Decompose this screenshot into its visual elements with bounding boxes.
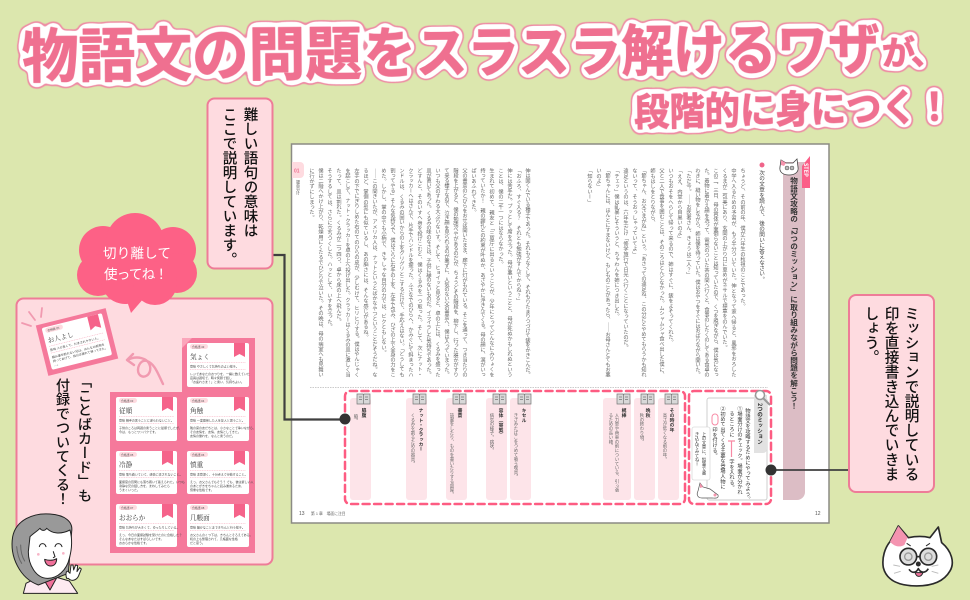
glossary entry: 晩秋: 秋の終わり頃。 <box>639 412 645 444</box>
card 43: レジであなたのおつりを、一緒に数えていた <box>190 371 250 376</box>
callout: mission marks: しょう。 <box>862 306 882 364</box>
speech balloon with pencil hint: 上の文章に、鉛筆で書 <box>701 431 707 476</box>
glossary entry: 書斎 <box>446 394 467 500</box>
body text: right page <box>586 167 746 377</box>
card 08: 机の上も整理されて、几帳面な性格 <box>190 536 238 541</box>
body text: left page: どすんと、そのいすへ身を投げこむと、僕はくるみを一つ取った。そして、次にナット・ <box>416 168 424 377</box>
card 07: おおらか <box>119 514 146 522</box>
title <box>22 2 944 94</box>
body text: left page: 左手の下でにぎりしめた右のてのひらの皮が、少しむけて、ヒリヒリする。僕はやんじゃく <box>353 167 360 377</box>
mission box: るところに <box>728 411 736 437</box>
speech balloon with pencil hint <box>692 427 710 480</box>
title: 、 <box>911 26 944 74</box>
illustration: cat with swirl glasses <box>883 526 952 586</box>
body text: left page: 伸には苦手だ。プッとして席を立った。母が悪いということと、母が死ぬかもしれぬという <box>506 167 514 377</box>
card 03: 今は、もっとワンパクです。 <box>119 429 158 434</box>
glossary entry: その時の年: 高さが低くなる前の年。 <box>662 412 668 461</box>
radiating accent lines <box>22 308 42 326</box>
glossary entry: 梶棒: 人力車や荷車の前についている、引っ張 <box>614 413 620 494</box>
card 05: 面接官の質問にも落ち着いて答えられた。いつも <box>119 479 185 484</box>
body text: right page: 父と二人で食事を囲むことは、そのころはとんどなかった。ムシャムシャ食べ出した僕に、 <box>658 168 666 377</box>
card 04: 角触 <box>190 406 204 415</box>
card 43: 合格語 43 <box>192 345 205 349</box>
card 04: その友情を、友情、友情としてきた。 <box>190 429 241 434</box>
page number right: 12 <box>815 511 821 517</box>
card 06: 慎重な性格です。 <box>190 487 214 492</box>
body text: right page: 「節ちゃんには、ほんとにすまないけど、もしものことがあったら、――お母さんとてもお悪 <box>604 168 612 377</box>
glossary entry: 脇腹: 脇。 <box>353 414 359 423</box>
card 07: おおらかな性格です。 <box>119 540 149 545</box>
panel: word cards <box>16 298 272 564</box>
card 08: お父さんのくつ下は、きちんとそろえてある。 <box>190 532 253 537</box>
body text: left page: クラッカーへはさんで、片手でハンドルを握った。ふさなでのひらへ、かみぐにて斜まったハ <box>407 168 414 377</box>
glossary entry: ナット・クラッカー: くるみを割るための器具。 <box>410 413 416 466</box>
card 06: 合格語 06 <box>192 453 205 457</box>
icon: small cat head <box>780 159 798 175</box>
body text: left page: るほど、掌側の型にも似ているし、あの脳さには、そんな感じがあるね。 <box>362 168 370 340</box>
page number left: 13 <box>299 511 305 517</box>
page background <box>292 144 829 523</box>
card 03: 子供のころは両親の言うことに従順でしたが、 <box>119 425 182 430</box>
card 08: 意味 細かなことまできちんと行う様子。 <box>190 524 245 530</box>
body text: left page: 皿が置いてあった。くるみの味のなさは、子供に縁のないものだ。イライラした気持ちであった。 <box>425 168 432 377</box>
body text: left page: て来る様子なので、泣き顔を見られるのが業ずに、人気のない父の書斎へ、僕は入っていまった。 <box>443 168 450 377</box>
glossary entry: その時の年: その時の年 <box>668 408 676 433</box>
card 04: 意味 一度関係した人を友人と思うこと。 <box>190 418 245 422</box>
card 05: 合格語 05 <box>121 453 134 457</box>
glossary entries <box>350 394 679 500</box>
speech cloud: 使ってね！ <box>104 266 168 282</box>
glossary entry: その時の年 <box>658 394 679 500</box>
body text: right page: た。着物に着かえ顔を洗って、電気のついた茶の間へ行くと、食事のしたくのしてある食卓の <box>703 168 710 377</box>
title: をスラスラ解けるワザ <box>364 5 880 89</box>
glossary entry: 晩秋 <box>634 394 655 500</box>
tilted card: 頼み事を断れない兄は、みんなの荷物を <box>51 342 105 359</box>
card 07 <box>116 504 182 547</box>
glossary entry: ナット・クラッカー: ナット・クラッカー <box>418 408 424 451</box>
speech cloud <box>77 213 197 313</box>
callout: mission marks: 印を直接書き込んでいきま <box>882 306 902 481</box>
glossary entry: キセル <box>510 394 531 500</box>
card 07: 合格語 07 <box>121 506 134 510</box>
body text: left page: そうするしては、さらに立ちつくした。ハッとして、いすを立った。 <box>326 168 334 329</box>
card 05: うまくいった。 <box>119 487 140 492</box>
tilted card: お人よし <box>47 330 74 345</box>
glossary entry: 晩秋: 晩秋 <box>644 407 652 419</box>
glossary entry: 書斎: 読書をしたり、ものを書いたりする部屋。 <box>449 412 455 497</box>
card 05 <box>116 451 185 494</box>
card 03: 意味 相手の言うことに逆らわないこと。 <box>119 418 174 422</box>
body text: right page: この二、三日、母の容体が面倒らないことは知っていたので、くつを脱ぎながら、僕は気になっ <box>712 168 720 377</box>
chapter tab: 場面分け <box>295 179 300 196</box>
body text: left page: 「おふろ、すぐ入る？ それとも勉強がすんでからね？」 <box>515 168 522 303</box>
body text: left page: いつも父のすわる大ぶりないす。そして、ヒョイッと見ると、卓の上には、くるみを盛った <box>434 168 442 377</box>
body text: left page: たって、皿は割れた。くるみが二つ四つ、卓から床の上へ飛んだ。 <box>335 168 342 324</box>
card 05: 冷静な兄の話し方を、まねしてみたら <box>119 483 170 488</box>
mission box: ②初めて出てくる主要な登場人物に <box>719 405 726 490</box>
panel text: 付録でついてくる！ <box>53 378 73 506</box>
card 43: 意味 やさしくて気持ちのよい様子。 <box>190 364 239 368</box>
body text: right page: 「節ちゃん、お父さまがね」という。「あさっての遠足ね、この分だとやめてもらうかも知れ <box>640 168 648 377</box>
icon: small sleeping cat <box>697 483 718 498</box>
tilted card: 意味 人が良くて、だまされやすい人。 <box>49 335 101 352</box>
card 06 <box>187 451 254 494</box>
mission box: 物語文を攻略するためにやってみよう。 <box>744 407 752 502</box>
glossary entry: ナット・クラッカー <box>406 394 427 500</box>
mission box: 字を入れる。 <box>728 459 736 490</box>
mission box: 印を付ける。 <box>712 426 718 458</box>
body text: right page: くるまが二包美にあり、玄関の上がり口に車めがネサルで標章をのんでいた。 <box>721 168 728 350</box>
glossary entry: 梶棒: るための長い棒。 <box>608 413 614 448</box>
glossary entry: 梶棒 <box>603 394 631 500</box>
glossary entry: 容体: 容体（容態） <box>498 407 504 437</box>
callout: difficult words: 難しい語句の意味は <box>240 107 262 238</box>
card 06: 慎重 <box>190 460 204 469</box>
step heading band: STEP <box>802 163 810 177</box>
card 07: そんなあなたはすばらしいです。 <box>119 536 164 541</box>
card 06: のあとがきをちゃんと読み進めるため、 <box>190 483 244 488</box>
body text: right page: 姉もはしをとりながら、 <box>650 167 656 225</box>
connector: left callout to glossary <box>273 255 350 424</box>
callout: mission marks: ミッションで説明している <box>902 306 922 481</box>
speech cloud: 切り離して <box>103 246 171 261</box>
chapter tab <box>292 162 304 196</box>
card 08: だと思う。 <box>190 540 205 545</box>
subtitle: 段階的に身につく！ <box>634 76 952 137</box>
card 43: 気ょく <box>190 352 210 361</box>
card 04: 隣の席の友だちとは、小さなことで争いながら、 <box>190 425 256 430</box>
card sheet <box>110 338 256 553</box>
glossary entry: 梶棒: 梶棒 <box>620 407 628 419</box>
body text: right page: 「ええ、内堂から目黒いのよ」 <box>676 168 684 241</box>
card 43: 「お疲れさま！」と言い、気持ちよい。 <box>190 379 244 384</box>
body text: right page: 「知らないー」 <box>586 168 594 204</box>
glossary entry: キセル: キセル <box>520 408 528 423</box>
card 07: 意味 気持ちが大きくて、ゆったりしている。 <box>119 524 180 530</box>
card 04 <box>187 397 256 441</box>
card 08: 几帳面 <box>190 513 210 522</box>
body text: right page: ないって、そうおっしゃっていてよ」 <box>632 168 638 256</box>
glossary entry: 脇腹 <box>350 394 371 500</box>
card 05: 意味 落ち着いていて、感情に流されないこと。 <box>119 472 183 476</box>
body text: left page <box>308 167 532 378</box>
body text: left page: 生まれて初めて、親友と「三原庁に出るということが、少年にとってどんなにみりょくを <box>488 167 496 377</box>
body text: left page: 階段を上がると、僕の勉強べやがあるのだが、ちょうどその階段を、柳下し、行った誰かがすり <box>452 167 460 377</box>
card 07: えっ、今日の面接試験を受けたのに合格した？ <box>119 532 182 537</box>
panel text: 「ことばカード」も <box>74 374 96 503</box>
mission box: ①場面分けのチェック。場面が分かれ <box>736 405 744 495</box>
callout: mission marks <box>849 295 934 492</box>
mission box <box>707 390 770 502</box>
body text: left page: ――この間きいたが、アメリカ人は、ナットというとばかなやつということだそうだね。な <box>371 168 378 377</box>
glossary entry: 脇腹: 脇腹 <box>360 407 368 419</box>
glossary entry: 容体: 病気の様子。病状。 <box>489 413 495 453</box>
tilted card: 持ってあげて、自分は遅れて帰ってきた。 <box>52 345 108 363</box>
separator <box>310 386 768 388</box>
book spread <box>292 144 829 523</box>
body text: left page: を起こして、ナット・クラッカーを卓の上へ投げ出した。クラッカーはくるみの皿に激しく当 <box>344 168 352 378</box>
body text: right page: いつもおそをへらして帰って来るので、姉はすぐに、飯をよそってくれた。 <box>667 168 674 345</box>
illustration: teacher <box>12 514 81 593</box>
tilted card: 合格語 05 <box>47 326 60 333</box>
glossary dashed frame <box>345 391 685 504</box>
running footer: 第 1 章 場面に注目 <box>311 511 346 516</box>
body text: left page: 僕は二階へかけ上がり、乾燥用にくたるでひどりで泣いた。その晩は、母の病室へも見舞い <box>317 167 324 377</box>
glossary entry: キセル: きざみたばこをつめて吸う喫具。 <box>513 413 519 479</box>
card 43: 店員は親切で、時々笑顔で話し <box>190 375 232 380</box>
body text: right page: いのよ」 <box>596 168 602 189</box>
body text: left page: ンドルは、くるみの固いからの上をグリグリとこするだけで、手応えはない。「どうしても <box>398 168 406 377</box>
body text: left page: 割ってやる」そんな気持ちで、僕はさらに右手の上を、左手で包み、ひざの上で全身の力をこ <box>389 167 396 377</box>
icon: magnifier <box>756 390 770 405</box>
step heading band <box>780 156 810 500</box>
mission box: 2つのミッション <box>756 403 764 445</box>
glossary entry: 書斎: 書斎 <box>456 407 464 419</box>
mission dashed frame <box>689 391 771 504</box>
card 06: えっ、お父さんでもそう？ でも、彼は新しい人 <box>190 479 254 484</box>
body text: left page: 持っていたか！ 親の謝礼との約束が叶ぬか、あざやかに浮きんでくる。母の顔に、涙がいっ <box>479 167 486 377</box>
body text: right page: 中学へ入るための予習が、もう半分ついていた。伸となって家へ帰ると、風邪をおろした <box>730 167 738 377</box>
title: が <box>882 26 915 74</box>
card 43 <box>187 343 250 387</box>
body text: left page: ぱいあふれてきた。 <box>470 168 478 215</box>
callout: difficult words: ここで説明しています。 <box>220 107 240 266</box>
chapter tab: 01 <box>294 168 300 174</box>
panel text <box>53 374 96 506</box>
card 05: 冷静 <box>119 460 133 469</box>
title: 物語文の問題 <box>22 7 362 94</box>
body text: right page: ちょうど、その前の年、僕が六年生の秋祖のことであった。 <box>739 168 746 308</box>
body text: left page: 伸は固くんでいる種子であった。それもうなくして、それもりたまりつづけて飯をかきこんだ。 <box>524 167 532 377</box>
card 06: 意味 注意深く、十分考えて行動すること。 <box>190 472 248 476</box>
body text: left page: ことは、僕の二千一つにはならなかった。 <box>497 168 504 267</box>
body text: right page: 「チェッ」僕は乱暴にそういうと、ちゃわんを姉につき出した。 <box>613 168 620 319</box>
card 03: 合格語 03 <box>121 399 134 403</box>
card 03: 従順 <box>119 406 133 415</box>
card 08 <box>187 504 253 547</box>
card 04: 友情の優れを、なんと言うのだ。 <box>190 433 235 438</box>
card 03 <box>116 397 182 441</box>
body text: right page: 遠足というのは、六年生だけ「修学旅行で日光へ行くことになっていたのだ。 <box>622 167 630 350</box>
card 04: 合格語 04 <box>192 399 205 403</box>
body text: right page: 「ただ今。――お医者さん、きょうは二人？」 <box>685 168 692 277</box>
body text: left page: 父の書斎のとびらをおせば開いたまま、廊下に灯がもれている。そこを通って、つき当たりの <box>461 168 468 377</box>
glossary entry: 容体 <box>486 394 507 500</box>
speech balloon with pencil hint: き込んでみてね！ <box>694 432 700 467</box>
card 08: 合格語 08 <box>192 506 205 510</box>
body text: left page: に行かずにしまった。 <box>308 168 316 220</box>
instruction line: 次の文章を読んで、後の問いに答えなさい。 <box>758 169 766 282</box>
body text: left page: めた。しかし、掌の中でも小柄で、きゃしゃな自分の力では、ビクともしない。 <box>380 168 388 355</box>
curly arrow <box>127 354 163 384</box>
tilted card <box>36 308 118 376</box>
callout: difficult words <box>208 98 272 268</box>
tilted card: …。 <box>53 362 60 367</box>
step heading band: 物語文攻略の「2つのミッション」に取り組みながら問題を解こう！ <box>788 176 800 410</box>
body text: right page: わきに、縫い物をしながら、姉は僕を待っていた。僕はおやつをすぐにはおばりながら聞いた。 <box>694 168 702 377</box>
connector: mission box to right callout <box>766 464 849 476</box>
